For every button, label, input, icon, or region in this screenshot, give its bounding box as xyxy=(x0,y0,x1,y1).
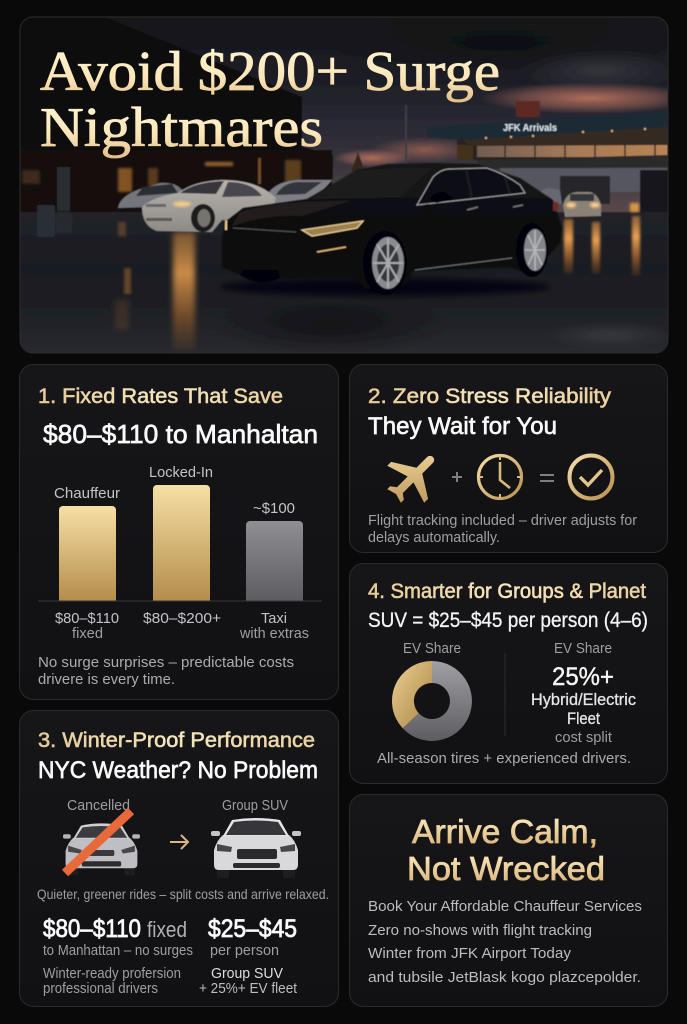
hero photo: dusk airport scene xyxy=(20,13,687,355)
stat: per person: + 25%+ EV fleet xyxy=(199,980,298,997)
icon: cancelled car xyxy=(63,823,140,875)
stat: per person xyxy=(199,915,298,997)
heading: 1. Fixed Rates That Save xyxy=(38,384,283,408)
subheading: They Wait for You xyxy=(368,413,557,440)
heading: 4. Smarter for Groups & Planet xyxy=(368,579,646,603)
bar chart: $80–$200+ xyxy=(143,610,221,627)
cta body text xyxy=(368,898,642,986)
stat: fixed price: Winter-ready profersion xyxy=(43,965,181,982)
cta heading xyxy=(407,813,605,887)
icon: clock xyxy=(478,456,522,498)
icon: plane xyxy=(376,439,451,514)
bar chart xyxy=(38,464,322,642)
label: cancelled: Cancelled xyxy=(67,797,130,814)
title xyxy=(40,41,500,159)
heading: 3. Winter-Proof Performance xyxy=(38,728,315,752)
cta body text: Book Your Affordable Chauffeur Services xyxy=(368,898,642,915)
stat: per person: $25–$45 xyxy=(208,915,297,943)
stat: 25% fleet: 25%+ xyxy=(552,663,614,691)
body text: drivere is every time. xyxy=(38,671,175,688)
bar chart: Taxi xyxy=(261,610,287,627)
stat: fixed price: professional drivers xyxy=(43,980,158,997)
stat: 25% fleet xyxy=(531,640,636,746)
stat: 25% fleet: cost split xyxy=(555,729,613,746)
bar chart: $80–$110 xyxy=(55,610,119,627)
label: group suv: Group SUV xyxy=(222,797,288,814)
body text xyxy=(38,654,294,688)
body text: Flight tracking included – driver adjusts for xyxy=(368,512,637,529)
panel: 3 winter-proof xyxy=(20,710,338,1006)
icon: check circle xyxy=(570,456,612,498)
stat: per person: Group SUV xyxy=(211,965,283,982)
cta heading: Not Wrecked xyxy=(407,850,605,887)
body text: No surge surprises – predictable costs xyxy=(38,654,294,671)
plus sign xyxy=(452,472,462,482)
stat: 25% fleet: Fleet xyxy=(567,709,600,728)
stat: fixed price: to Manhattan – no surges xyxy=(43,942,193,959)
equals sign xyxy=(540,475,554,481)
heading: 2. Zero Stress Reliability xyxy=(368,384,611,408)
icon: arrow xyxy=(170,835,188,849)
bar chart: with extras xyxy=(239,625,309,642)
bar chart: fixed xyxy=(72,625,103,642)
cta body text: Zero no-shows with flight tracking xyxy=(368,922,592,939)
sign: JFK Arrivals: JFK Arrivals xyxy=(503,122,557,134)
main black sedan xyxy=(220,163,562,296)
stat: per person: per person xyxy=(210,942,279,959)
title: Avoid $200+ Surge xyxy=(40,41,500,103)
donut chart: ev share xyxy=(392,640,472,741)
caption: All-season tires + experienced drivers. xyxy=(377,750,631,767)
panel: call to action xyxy=(350,794,668,1006)
caption: Quieter, greener rides – split costs and arrive relaxed. xyxy=(37,886,329,902)
stat: fixed price xyxy=(43,915,193,997)
donut chart: ev share: EV Share xyxy=(403,640,461,657)
subheading: SUV = $25–$45 per person (4–6) xyxy=(368,609,648,632)
icon: orange strike-through xyxy=(65,811,131,873)
panel: 1 fixed rates xyxy=(20,364,338,700)
title: Nightmares xyxy=(40,97,323,159)
cta heading: Arrive Calm, xyxy=(412,813,598,850)
stat: fixed price: fixed xyxy=(147,917,187,942)
cta body text: and tubsile JetBlask kogo plazcepolder. xyxy=(368,969,641,986)
body text: delays automatically. xyxy=(368,529,500,546)
cta body text: Winter from JFK Airport Today xyxy=(368,945,571,962)
panel: 2 zero stress xyxy=(350,364,668,552)
subheading: $80–$110 to Manhaltan xyxy=(43,419,318,449)
stat: 25% fleet: EV Share xyxy=(554,640,612,657)
stat: 25% fleet: Hybrid/Electric xyxy=(531,690,636,709)
bar chart: Chauffeur xyxy=(54,485,120,502)
bar chart: ~$100 xyxy=(253,500,295,517)
bar chart: Locked-In xyxy=(149,464,213,481)
panel: 4 groups and planet xyxy=(350,564,668,784)
icon: group suv car xyxy=(211,818,301,878)
panel: hero xyxy=(20,13,687,355)
stat: fixed price: $80–$110 xyxy=(43,915,141,943)
body text xyxy=(368,512,637,546)
subheading: NYC Weather? No Problem xyxy=(38,757,318,784)
